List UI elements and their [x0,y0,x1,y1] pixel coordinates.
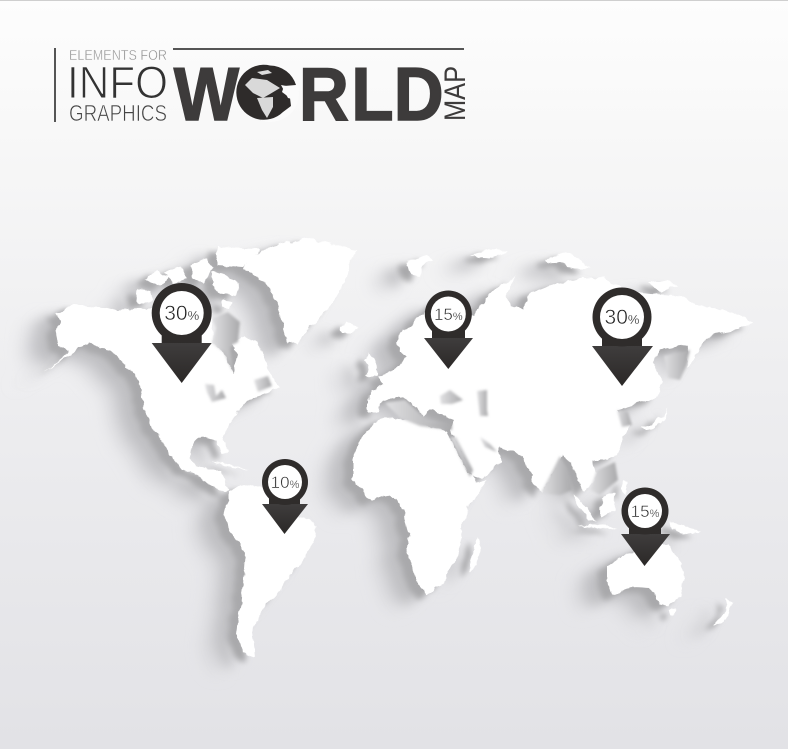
java [578,524,618,530]
arctic islands [135,247,260,308]
persian gulf [480,437,497,452]
franz josef land [470,250,508,258]
eurasia [367,277,753,493]
south china sea [590,462,618,495]
caspian sea [477,390,488,416]
uk [364,352,378,376]
map far shadow [10,255,719,673]
iceland [340,323,357,333]
hudson bay [212,312,240,372]
greenland [243,239,357,345]
pin: asia 30%: 30% [605,306,640,329]
map near shadow [35,244,744,662]
inland seas [205,312,690,495]
madagascar [469,538,482,572]
text: world: WORLD [174,53,444,137]
africa [353,418,487,595]
yellow sea [617,410,632,427]
pin: south america 10% [262,459,308,534]
south america [225,483,317,657]
cuba [212,462,250,470]
red sea [450,437,473,477]
new siberian islands [648,281,678,292]
great lakes [205,384,226,402]
pin: europe 15%: 15% [434,305,463,324]
sumatra [572,495,596,522]
pin: australia 15% [621,488,670,566]
text: info: INFO [67,57,168,108]
pin: australia 15%: 15% [631,502,660,521]
pin: asia 30% [592,288,653,386]
mediterranean [385,400,452,430]
text: map: MAP [439,66,472,121]
okhotsk [664,350,690,380]
north america [44,304,280,493]
pin: north america 30% [152,283,212,383]
severny [546,252,590,268]
new zealand [713,597,733,628]
svalbard [406,256,434,276]
map soft shadow [22,250,731,668]
text: elements for: ELEMENTS FOR [69,47,167,64]
pin: south america 10%: 10% [271,473,300,492]
title lockup [54,47,472,137]
text: graphics: GRAPHICS [69,100,167,126]
borneo [598,492,616,516]
pin: north america 30%: 30% [164,302,200,325]
australia [608,545,685,605]
philippines [620,480,628,494]
new guinea [670,522,702,534]
kamchatka [686,338,705,368]
icon: globe [236,64,299,122]
world map [44,239,753,657]
bay of bengal [541,456,572,495]
pin: europe 15% [424,290,473,369]
tasmania [668,609,676,618]
black sea [440,390,463,404]
japan [640,408,668,431]
gulf of st lawrence [254,376,272,392]
